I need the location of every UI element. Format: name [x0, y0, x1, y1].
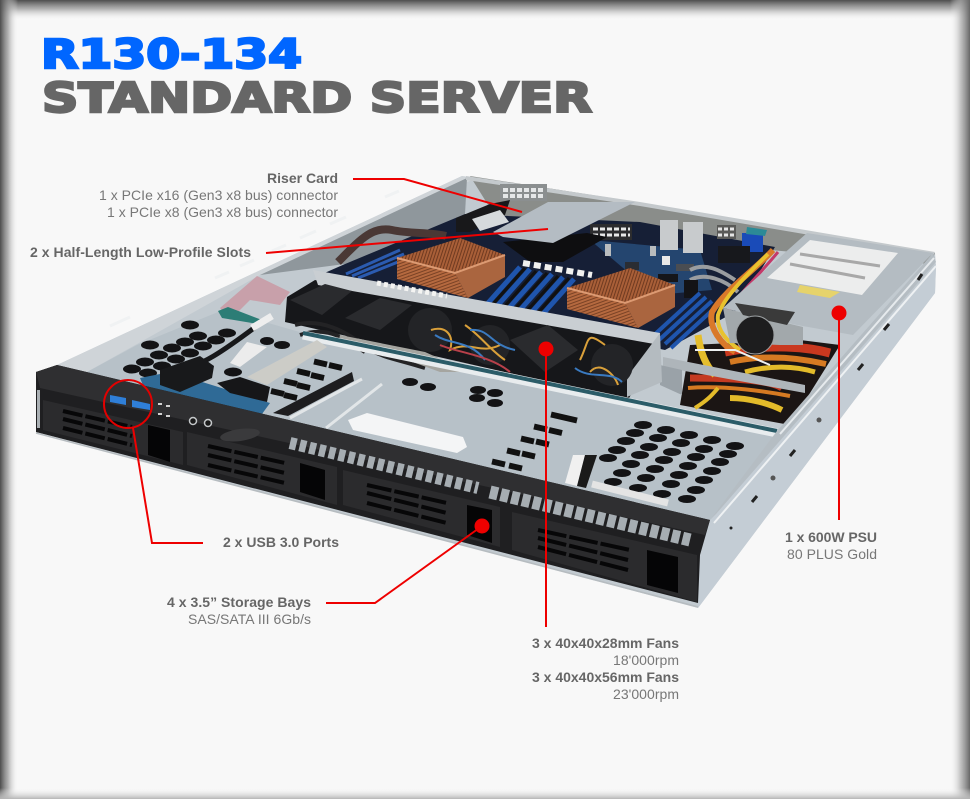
slots leader [266, 229, 548, 253]
bay 3 [343, 470, 500, 547]
label: USB ports: 2 x USB 3.0 Ports [223, 534, 339, 550]
rear wall [466, 176, 935, 264]
label: fans: 3 x 40x40x28mm Fans [532, 635, 679, 651]
fan 2 [345, 298, 412, 330]
status icons [158, 404, 170, 416]
USB board [140, 372, 270, 414]
bay 2 [187, 432, 337, 505]
cable strap [565, 455, 585, 486]
cable flap [230, 342, 267, 367]
left latch [37, 390, 40, 428]
title [41, 32, 592, 122]
label: fans: 18'000rpm [613, 652, 679, 668]
fan 5 [510, 325, 578, 372]
label: storage bays: 4 x 3.5” Storage Bays [167, 594, 311, 610]
fans leader [538, 342, 554, 627]
chassis base [36, 176, 936, 608]
label: PSU [785, 529, 877, 562]
riser leader [353, 179, 522, 212]
heatsink CPU 1 [397, 238, 505, 298]
grey ribbon cable [338, 335, 470, 372]
drive plate [57, 310, 777, 520]
fan 6 [591, 344, 633, 386]
USB header [160, 356, 214, 392]
vent strip left [290, 443, 478, 488]
fan board strip [303, 335, 777, 433]
label: riser card: Riser Card [267, 170, 338, 186]
label: fans: 23'000rpm [613, 686, 679, 702]
label: fans [532, 635, 679, 702]
USB leader [133, 428, 203, 543]
top bar [36, 365, 710, 535]
right side panel [698, 253, 936, 608]
ribbon cable front [247, 340, 327, 385]
left wall [57, 176, 472, 372]
black cables [295, 323, 425, 368]
plate holes left [123, 320, 290, 378]
power buttons [190, 418, 212, 426]
memory slots right [653, 293, 718, 348]
server chassis [36, 176, 936, 608]
motherboard [320, 214, 775, 350]
USB highlight circle [104, 380, 152, 428]
bay 1 [43, 400, 183, 465]
PCIe slots [503, 233, 607, 262]
title: STANDARD SERVER [42, 74, 592, 122]
riser rear bracket [500, 184, 632, 240]
fan 4 [470, 325, 510, 365]
PSU wiring [680, 250, 840, 425]
white plate strip [348, 413, 467, 453]
release tab [219, 426, 261, 444]
fan 3 [408, 308, 452, 352]
riser cover [493, 202, 635, 243]
storage leader [326, 518, 490, 603]
fan cage [285, 270, 662, 400]
plate holes middle [402, 378, 503, 407]
small heatsink [472, 210, 509, 231]
USB cable [172, 322, 262, 372]
PSU [723, 233, 933, 354]
heatsink CPU 2 [567, 268, 675, 328]
USB ports [110, 395, 150, 410]
memory slots centre [488, 263, 592, 315]
PSU retention bracket [663, 357, 805, 393]
vent strip right [490, 492, 690, 540]
label: riser card [99, 170, 338, 220]
riser connector [456, 200, 510, 232]
board components [605, 244, 738, 298]
label: PSU: 1 x 600W PSU [785, 529, 877, 545]
label: storage bays: SAS/SATA III 6Gb/s [188, 611, 311, 627]
memory slots left [346, 250, 408, 278]
callout lines and markers [104, 179, 846, 627]
fan wires [431, 325, 618, 385]
SATA connector [217, 377, 270, 402]
PSU vent [735, 303, 795, 325]
PSU yellow sticker [797, 285, 840, 298]
pink ribbon cables [220, 276, 290, 320]
PSU fan [736, 316, 774, 354]
front panel [36, 365, 710, 603]
PSU leader [832, 306, 846, 520]
bottom edge [36, 433, 698, 607]
label: riser card: 1 x PCIe x16 (Gen3 x8 bus) connector [99, 187, 338, 203]
small board [218, 307, 262, 324]
I/O ports [660, 220, 767, 263]
plate vents [271, 362, 577, 468]
brown cable bundle [338, 229, 446, 262]
title: R130-134 [41, 32, 302, 78]
white sticker [592, 484, 668, 503]
plate holes right [599, 421, 744, 503]
label: storage bays [167, 594, 311, 627]
drive bracket [273, 372, 382, 428]
label: low-profile slots: 2 x Half-Length Low-Profile Slots [30, 244, 251, 260]
PSU label [767, 240, 898, 295]
label: riser card: 1 x PCIe x8 (Gen3 x8 bus) connector [107, 204, 338, 220]
bay 4 [512, 512, 697, 602]
label: PSU: 80 PLUS Gold [787, 546, 877, 562]
fan 1 [290, 284, 352, 315]
label: fans: 3 x 40x40x56mm Fans [532, 669, 679, 685]
